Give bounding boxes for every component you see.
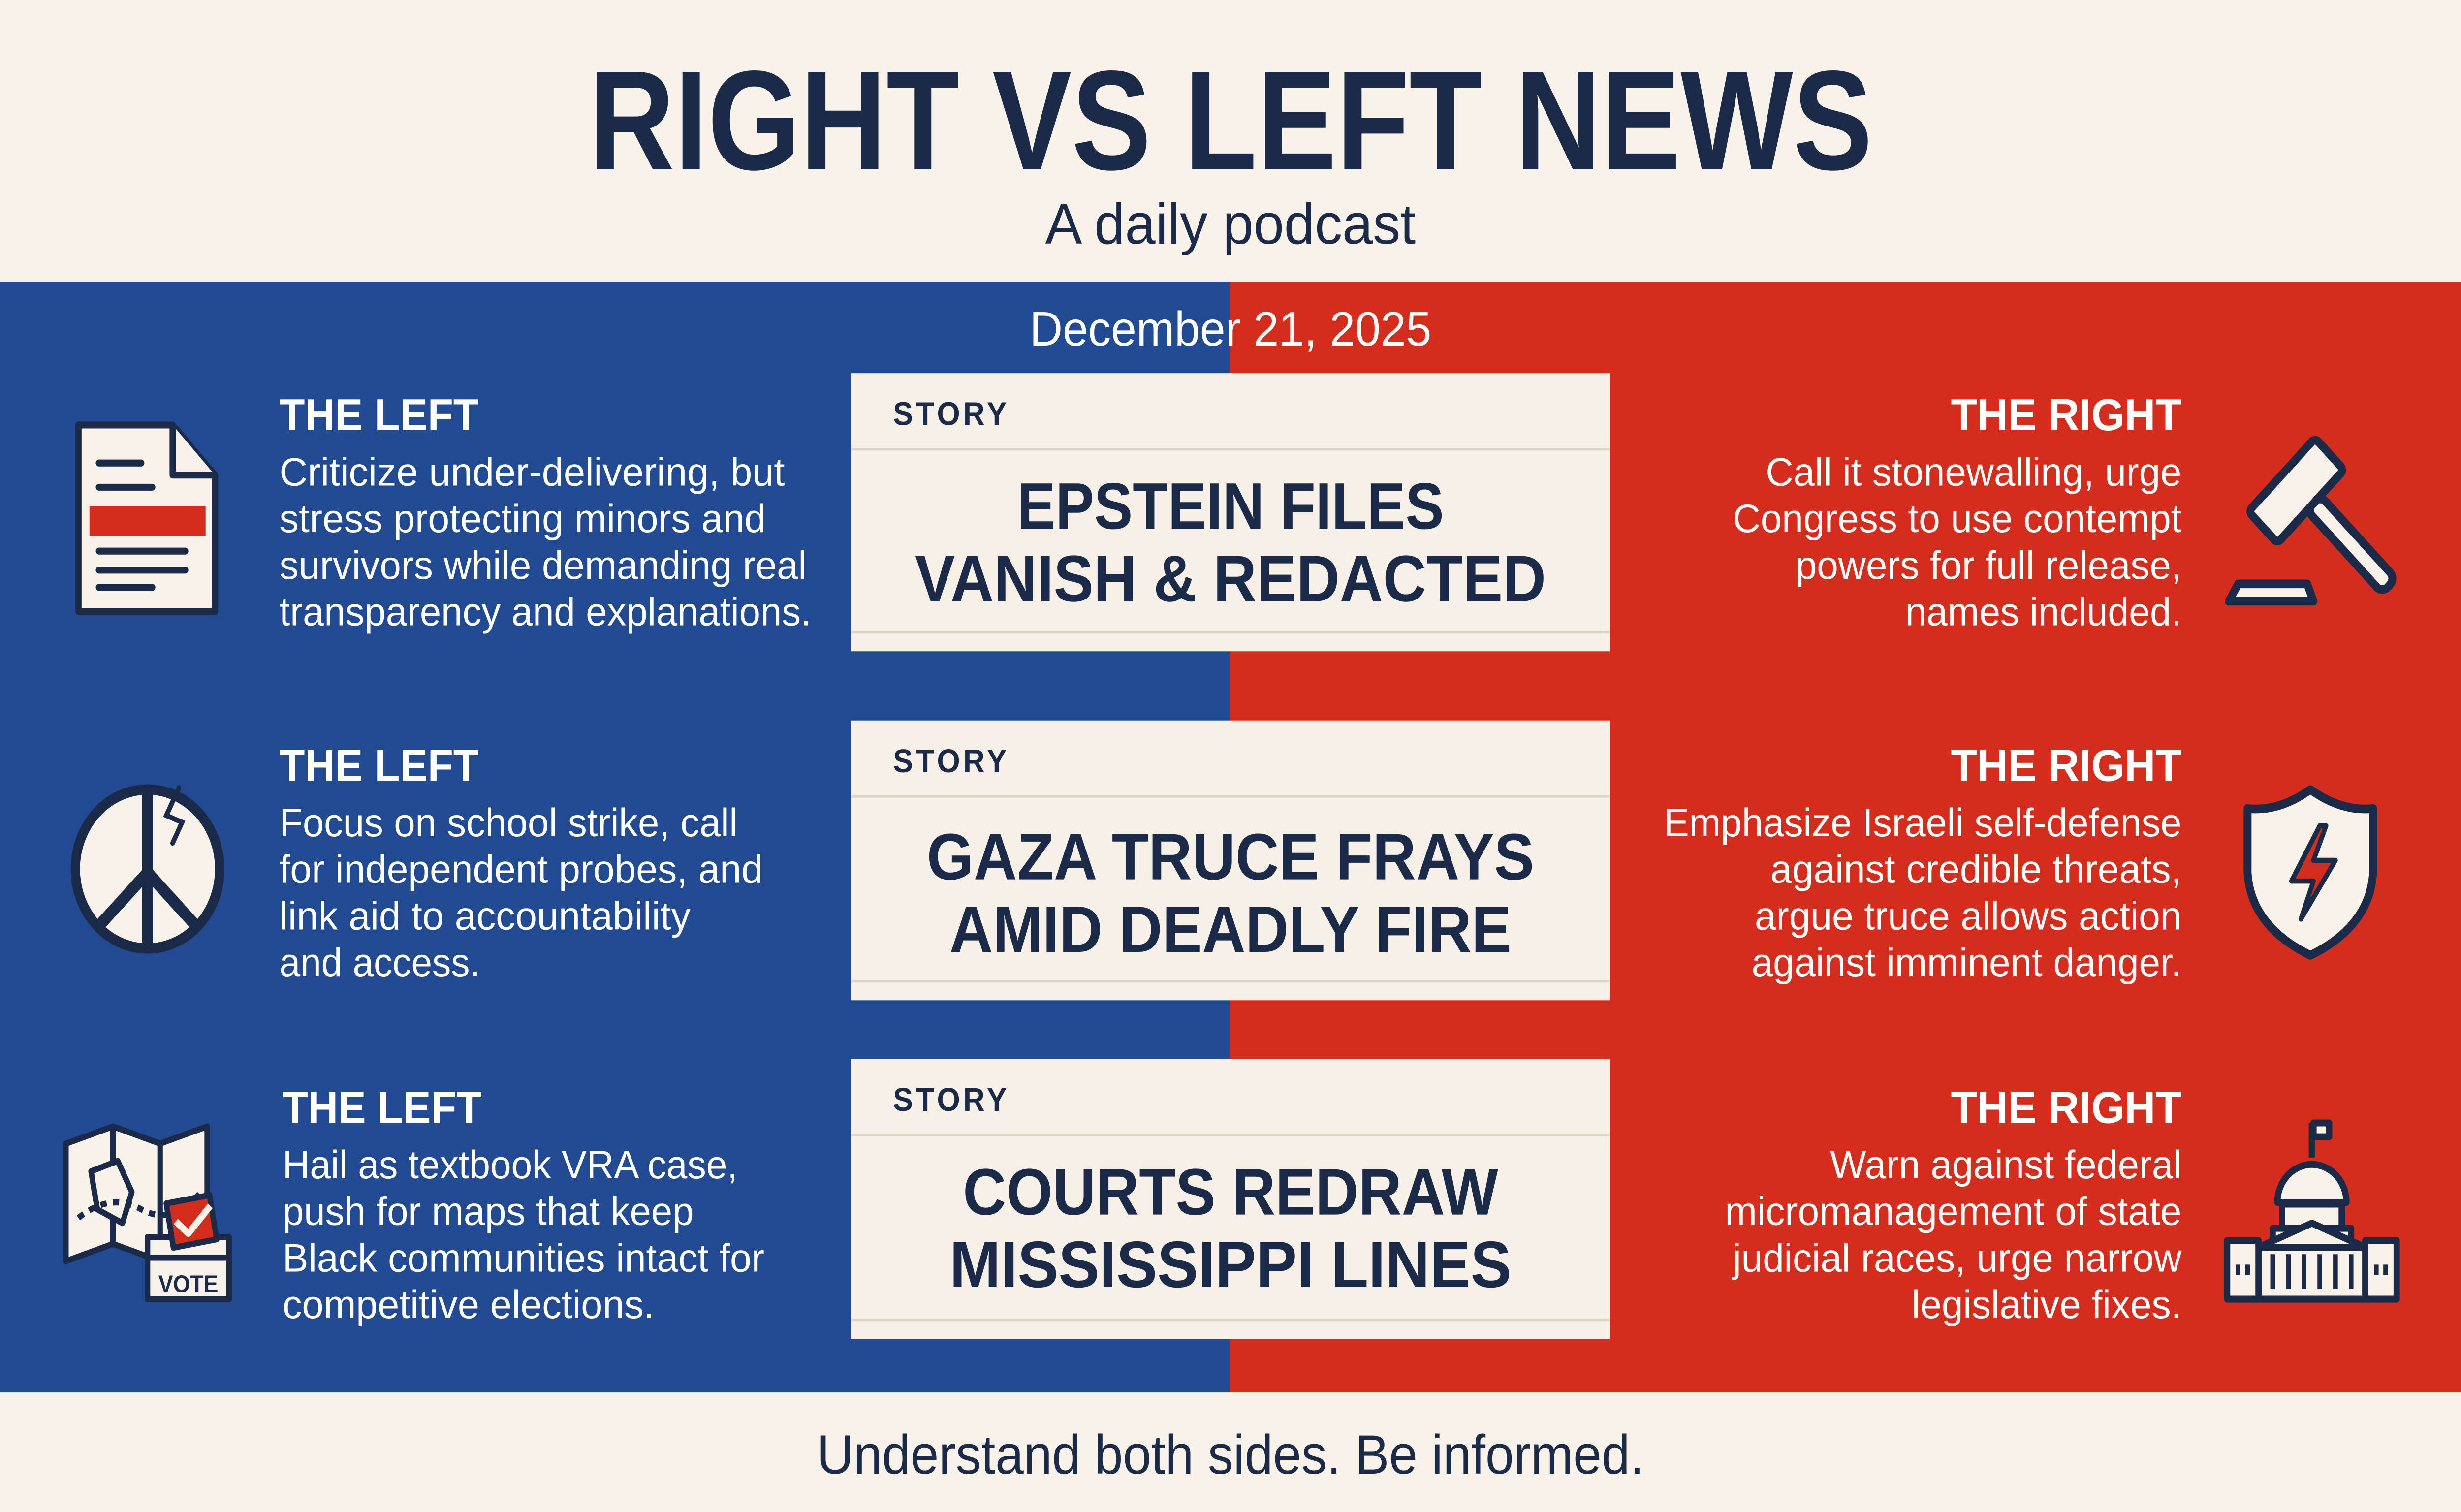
icon: gavel: [2229, 438, 2396, 601]
title: RIGHT VS LEFT NEWS: [589, 41, 1872, 200]
subtitle: A daily podcast: [1045, 192, 1416, 256]
icon: redacted document: [78, 425, 215, 612]
right text 1: powers for full release,: [1796, 543, 2181, 588]
left text 3: push for maps that keep: [283, 1189, 694, 1233]
footer tagline: Understand both sides. Be informed.: [817, 1424, 1644, 1485]
left text 1: THE LEFT: [280, 390, 479, 440]
card: story 1: VANISH & REDACTED: [915, 542, 1546, 616]
panel: right red band: [1230, 282, 2461, 1392]
card: story 2: STORY: [893, 742, 1010, 780]
card: story 1: STORY: [893, 395, 1010, 432]
right text 1: [1733, 390, 2181, 634]
card: story 1: EPSTEIN FILES: [1017, 470, 1444, 543]
right text 1: Call it stonewalling, urge: [1766, 450, 2181, 494]
icon: broken peace sign: [75, 788, 220, 948]
panel: left blue band: [0, 282, 1230, 1392]
right text 2: argue truce allows action: [1755, 894, 2181, 938]
card: story 3: STORY: [893, 1081, 1010, 1118]
card: story 2: [851, 721, 1610, 1000]
right text 1: names included.: [1905, 590, 2181, 634]
right text 3: Warn against federal: [1830, 1143, 2181, 1187]
right text 2: Emphasize Israeli self-defense: [1664, 801, 2181, 845]
right text 2: [1664, 741, 2181, 985]
icon: capitol building: [2227, 1123, 2397, 1299]
left text 2: for independent probes, and: [280, 847, 763, 891]
date: December 21, 2025: [1030, 302, 1431, 356]
left text 2: THE LEFT: [280, 741, 479, 790]
left text 3: [283, 1083, 764, 1327]
right text 3: legislative fixes.: [1912, 1283, 2181, 1327]
card: story 2: GAZA TRUCE FRAYS: [927, 820, 1534, 894]
card: story 3: COURTS REDRAW: [963, 1156, 1498, 1229]
icon: map with ballot box: [66, 1127, 229, 1299]
right text 3: [1725, 1083, 2182, 1327]
left text 2: Focus on school strike, call: [280, 801, 738, 845]
card: story 3: [851, 1059, 1610, 1339]
card: story 3: MISSISSIPPI LINES: [949, 1228, 1512, 1301]
right text 1: Congress to use contempt: [1733, 497, 2181, 541]
right text 2: against imminent danger.: [1752, 941, 2181, 985]
right text 3: micromanagement of state: [1725, 1189, 2181, 1233]
left text 2: and access.: [280, 941, 480, 985]
left text 1: Criticize under-delivering, but: [280, 450, 785, 494]
left text 3: Hail as textbook VRA case,: [283, 1143, 738, 1187]
left text 2: [280, 741, 763, 985]
left text 1: stress protecting minors and: [280, 497, 766, 541]
right text 2: THE RIGHT: [1951, 741, 2181, 790]
icon: shield with lightning: [2247, 789, 2373, 955]
icon: map with ballot box: VOTE: [158, 1271, 218, 1297]
left text 3: THE LEFT: [283, 1083, 482, 1133]
right text 3: judicial races, urge narrow: [1732, 1236, 2182, 1280]
left text 2: link aid to accountability: [280, 894, 691, 938]
right text 1: THE RIGHT: [1951, 390, 2181, 440]
left text 3: Black communities intact for: [283, 1236, 764, 1280]
left text 1: [280, 390, 812, 634]
card: story 2: AMID DEADLY FIRE: [949, 893, 1512, 966]
right text 2: against credible threats,: [1770, 847, 2181, 891]
card: story 1: [851, 373, 1610, 651]
right text 3: THE RIGHT: [1951, 1083, 2181, 1133]
left text 3: competitive elections.: [283, 1283, 655, 1327]
left text 1: transparency and explanations.: [280, 590, 812, 634]
left text 1: survivors while demanding real: [280, 543, 807, 588]
